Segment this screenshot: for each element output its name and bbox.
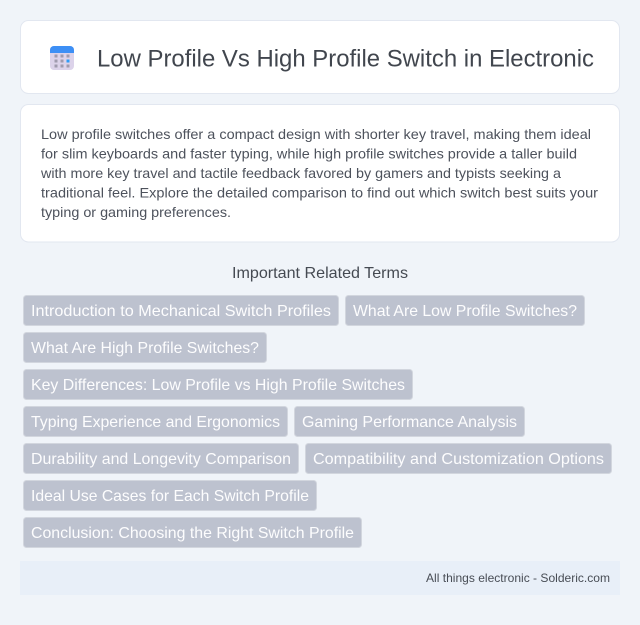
tag: ideal use cases [24,480,316,510]
tag: compatibility [306,444,612,474]
tag: gaming performance: Gaming Performance Analysis [302,414,517,431]
text block: description: traditional feel. Explore the detailed comparison to find out which switch best suits your [41,184,598,200]
text block: description: with more key travel and tactile feedback favored by gamers and typists seeking a [40,165,561,181]
tag: high profile: What Are High Profile Switches? [31,340,259,357]
tag: typing experience [24,406,288,436]
icon: calendar [50,46,74,70]
panel: related terms tags [24,296,612,548]
text block: description: Low profile switches offer a compact design with shorter key travel, making them ideal [41,126,591,142]
tag: gaming performance [294,406,524,436]
tag: durability: Durability and Longevity Comparison [31,451,291,468]
tag: typing experience: Typing Experience and Ergonomics [31,414,280,431]
tag: introduction: Introduction to Mechanical Switch Profiles [31,303,331,320]
footer [20,561,620,595]
tag: ideal use cases: Ideal Use Cases for Each Switch Profile [31,488,309,505]
footer credit: All things electronic - Solderic.com [426,571,610,585]
panel: title card [20,20,620,94]
tag: high profile [24,332,266,362]
heading: important related terms: Important Related Terms [232,265,408,282]
panel: intro description [20,104,620,242]
tag: conclusion: Conclusion: Choosing the Right Switch Profile [31,525,354,542]
text block: description [40,126,598,220]
text block: description: for slim keyboards and faster typing, while high profile switches provide a taller build [41,146,577,162]
tag: key differences: Key Differences: Low Profile vs High Profile Switches [31,377,405,394]
tag: low profile: What Are Low Profile Switches? [353,303,577,320]
text block: description: typing or gaming preferences. [41,204,231,220]
title: Low Profile Vs High Profile Switch in Electronic [97,46,594,72]
tag: low profile [346,296,584,326]
tag: conclusion [24,518,362,548]
tag: introduction [24,296,338,326]
tag: compatibility: Compatibility and Customization Options [313,451,604,468]
tag: durability [24,444,298,474]
tag: key differences [24,370,412,400]
